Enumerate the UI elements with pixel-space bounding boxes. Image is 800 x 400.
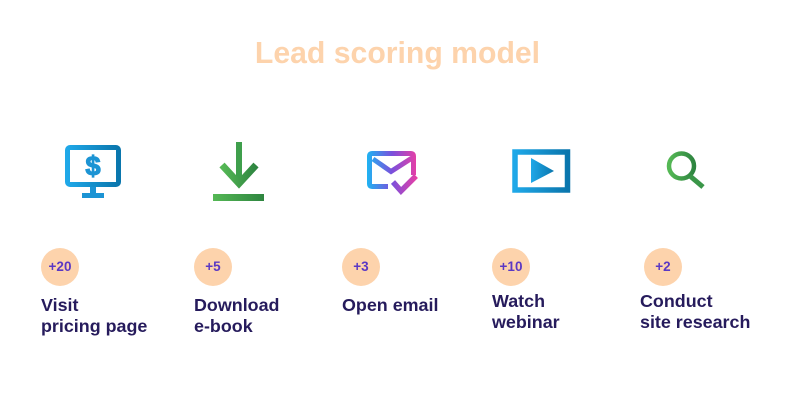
badge +20: +20	[49, 259, 71, 274]
label: Conduct	[640, 291, 713, 311]
label: Download	[194, 295, 279, 315]
icon: monitor with dollar: $	[85, 151, 101, 181]
label: Visit	[41, 295, 78, 315]
item: visit pricing page	[41, 248, 147, 336]
item: watch webinar	[492, 248, 560, 332]
label	[41, 295, 147, 336]
item: download e-book	[194, 248, 279, 336]
label: webinar	[492, 312, 560, 332]
badge +2	[644, 248, 682, 286]
badge +20	[41, 248, 79, 286]
label: Open email	[342, 295, 438, 315]
item: open email	[342, 248, 438, 315]
icon: monitor with dollar	[68, 148, 118, 198]
label: site research	[640, 312, 750, 332]
label	[492, 291, 560, 332]
badge +10: +10	[500, 259, 522, 274]
badge +5: +5	[205, 259, 221, 274]
label: e-book	[194, 316, 253, 336]
icon: magnifying glass	[669, 154, 703, 187]
badge +2: +2	[655, 259, 671, 274]
icon: email with check	[370, 154, 416, 191]
label: pricing page	[41, 316, 147, 336]
icon: download arrow	[213, 142, 264, 201]
badge +10	[492, 248, 530, 286]
label	[640, 291, 750, 332]
badge +5	[194, 248, 232, 286]
item: conduct site research	[640, 248, 750, 332]
label	[194, 295, 279, 336]
title: Lead scoring model	[255, 37, 540, 70]
icon: video player	[515, 152, 568, 190]
label: Watch	[492, 291, 545, 311]
badge +3: +3	[353, 259, 369, 274]
badge +3	[342, 248, 380, 286]
